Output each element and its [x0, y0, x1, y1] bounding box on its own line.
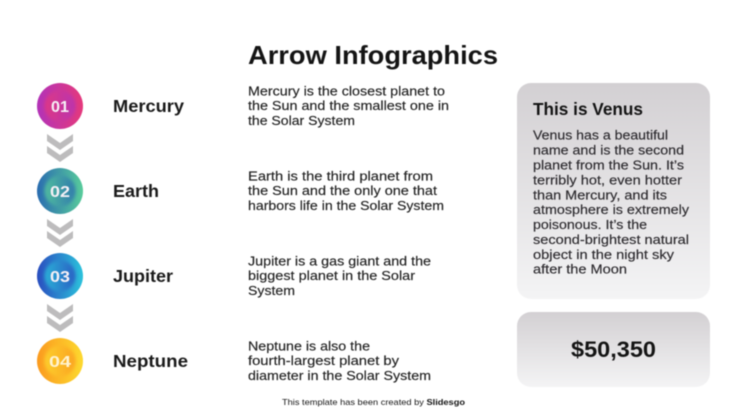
badge: 03: 03 — [50, 269, 70, 286]
text: Mercury description — [248, 84, 449, 128]
title: Arrow Infographics — [248, 40, 498, 70]
text: Earth description: Earth is the third planet from — [248, 168, 433, 184]
arrow: Jupiter to Neptune — [47, 304, 73, 332]
panel body text: object in the night sky — [533, 247, 675, 262]
text: Neptune description — [248, 338, 431, 383]
text: Jupiter description — [248, 254, 431, 298]
text: Neptune description: fourth-largest planet by — [248, 353, 400, 368]
panel body text: planet from the Sun. It’s — [533, 158, 685, 172]
badge: 03 — [37, 253, 83, 299]
text: Mercury description: Mercury is the closest planet to — [248, 84, 445, 98]
panel body text: atmosphere is extremely — [533, 202, 690, 217]
text: Jupiter description: Jupiter is a gas giant and the — [248, 254, 431, 268]
footer credit: This template has been created by Slidesgo — [282, 398, 465, 407]
panel heading: This is Venus — [533, 99, 643, 119]
badge: 02: 02 — [50, 184, 70, 201]
text: Earth description: the Sun and the only one that — [248, 183, 437, 198]
badge: 01: 01 — [51, 99, 69, 116]
label: Neptune: Neptune — [113, 351, 188, 371]
panel body text — [533, 128, 690, 276]
label: Jupiter: Jupiter — [113, 266, 173, 286]
badge: 02 — [37, 168, 83, 214]
panel body text: name and is the second — [533, 142, 684, 158]
badge: 01 — [37, 83, 83, 129]
panel body text: Venus has a beautiful — [533, 128, 668, 142]
panel: Venus — [517, 83, 710, 299]
text: Earth description — [248, 168, 444, 213]
text: Neptune description: Neptune is also the — [248, 338, 370, 354]
price value: $50,350 — [571, 337, 656, 362]
panel body text: poisonous. It’s the — [533, 217, 647, 232]
panel body text: than Mercury, and its — [533, 188, 668, 202]
panel body text: terribly hot, even hotter — [533, 172, 683, 188]
text: Mercury description: the Solar System — [248, 113, 355, 128]
panel: price — [517, 312, 710, 387]
label: Earth: Earth — [113, 181, 159, 201]
label: Mercury: Mercury — [113, 96, 184, 116]
text: Neptune description: diameter in the Solar System — [248, 368, 431, 383]
panel body text: after the Moon — [533, 262, 627, 276]
text: Earth description: harbors life in the Solar System — [248, 198, 444, 213]
arrow: Mercury to Earth — [47, 134, 73, 162]
text: Jupiter description: System — [248, 283, 295, 298]
badge: 04: 04 — [49, 354, 71, 371]
panel body text: second-brightest natural — [533, 232, 689, 247]
arrow: Earth to Jupiter — [47, 219, 73, 247]
text: Jupiter description: biggest planet in the Solar — [248, 268, 416, 283]
badge: 04 — [37, 338, 83, 384]
text: Mercury description: the Sun and the smallest one in — [248, 98, 449, 113]
